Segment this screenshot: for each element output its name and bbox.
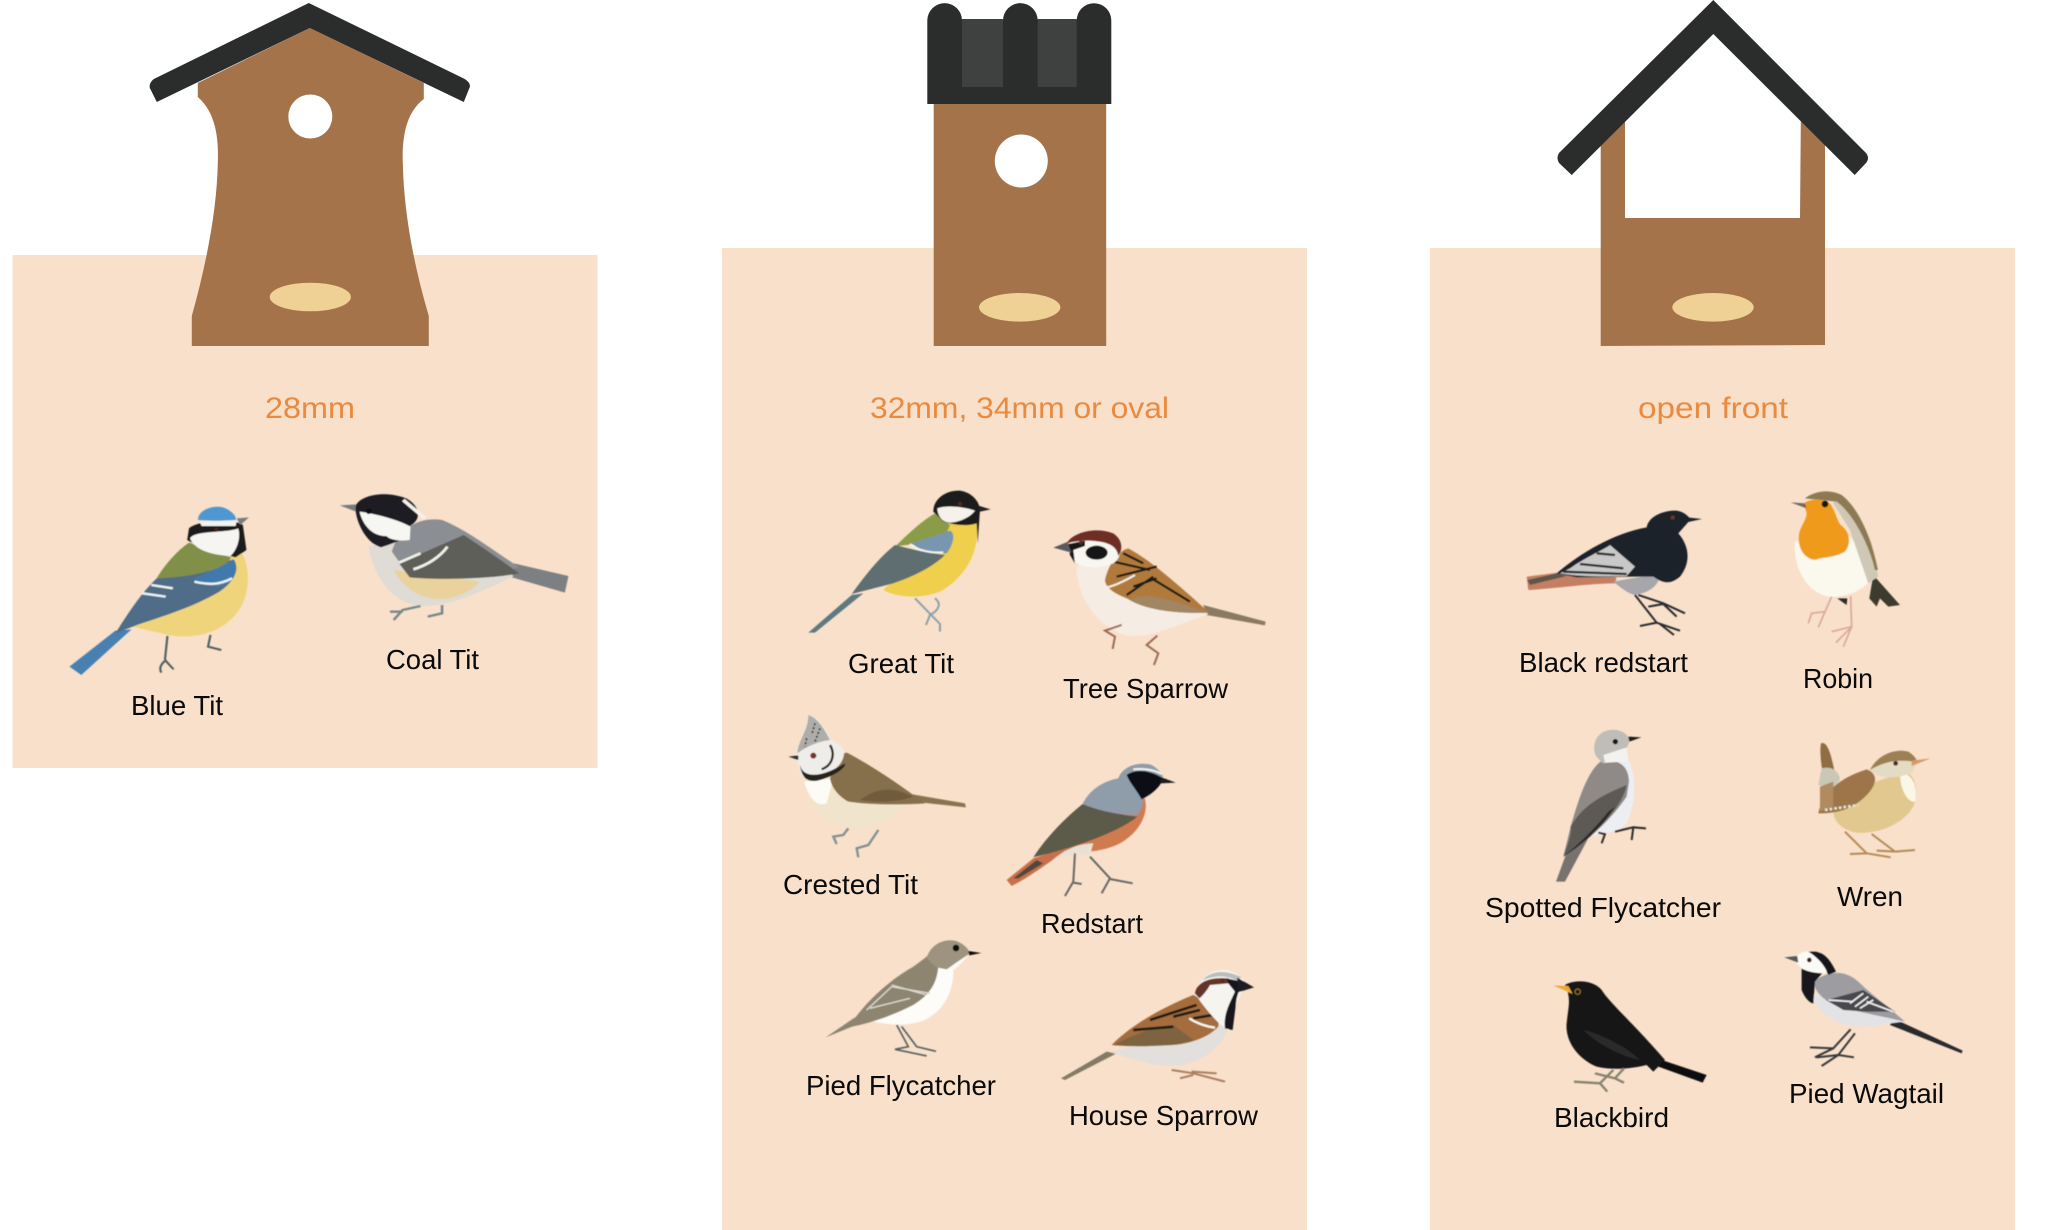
label: Spotted Flycatcher: Spotted Flycatcher — [1485, 892, 1721, 923]
label: Blackbird: Blackbird — [1554, 1102, 1669, 1133]
label: Great Tit: Great Tit — [848, 648, 954, 679]
bird: Tree Sparrow — [1053, 530, 1266, 665]
bird: House Sparrow — [1061, 970, 1254, 1082]
label: Tree Sparrow: Tree Sparrow — [1063, 673, 1228, 704]
heading: open front: open front — [1638, 392, 1789, 425]
bird: Pied Flycatcher — [826, 940, 981, 1056]
icon: nest box with 32mm hole — [927, 3, 1111, 346]
label: Wren: Wren — [1837, 881, 1903, 912]
bird: Pied Wagtail — [1784, 951, 1963, 1066]
label: Robin: Robin — [1803, 663, 1873, 694]
bird: Coal Tit — [340, 494, 568, 620]
label: House Sparrow: House Sparrow — [1069, 1100, 1258, 1131]
panel background 32mm — [722, 248, 1307, 1230]
bird: Spotted Flycatcher — [1556, 730, 1646, 882]
icon: nest box with 28mm hole — [150, 3, 470, 346]
label: Blue Tit: Blue Tit — [131, 690, 223, 721]
bird: Great Tit — [808, 491, 991, 633]
panel: 28mm — [12, 3, 598, 768]
label: Crested Tit: Crested Tit — [783, 869, 918, 900]
panel: 32mm, 34mm or oval — [722, 3, 1307, 1230]
bird: Robin — [1791, 491, 1900, 647]
label: Pied Wagtail: Pied Wagtail — [1789, 1078, 1944, 1109]
label: Black redstart: Black redstart — [1519, 647, 1688, 678]
icon: open fronted nest box — [1558, 0, 1868, 346]
label: Pied Flycatcher: Pied Flycatcher — [806, 1070, 996, 1101]
bird: Blackbird — [1553, 981, 1707, 1092]
label: Coal Tit: Coal Tit — [386, 644, 479, 675]
bird: Blue Tit — [69, 507, 249, 675]
bird: Redstart — [1007, 764, 1176, 896]
panel background open front — [1430, 248, 2015, 1230]
panel background 28mm — [12, 255, 598, 768]
bird: Crested Tit — [788, 715, 966, 857]
bird: Black redstart — [1527, 511, 1702, 635]
heading: 32mm, 34mm or oval: 32mm, 34mm or oval — [870, 392, 1169, 425]
heading: 28mm: 28mm — [265, 392, 355, 425]
bird: Wren — [1818, 743, 1931, 857]
panel: open front — [1430, 0, 2015, 1230]
label: Redstart: Redstart — [1041, 908, 1143, 939]
